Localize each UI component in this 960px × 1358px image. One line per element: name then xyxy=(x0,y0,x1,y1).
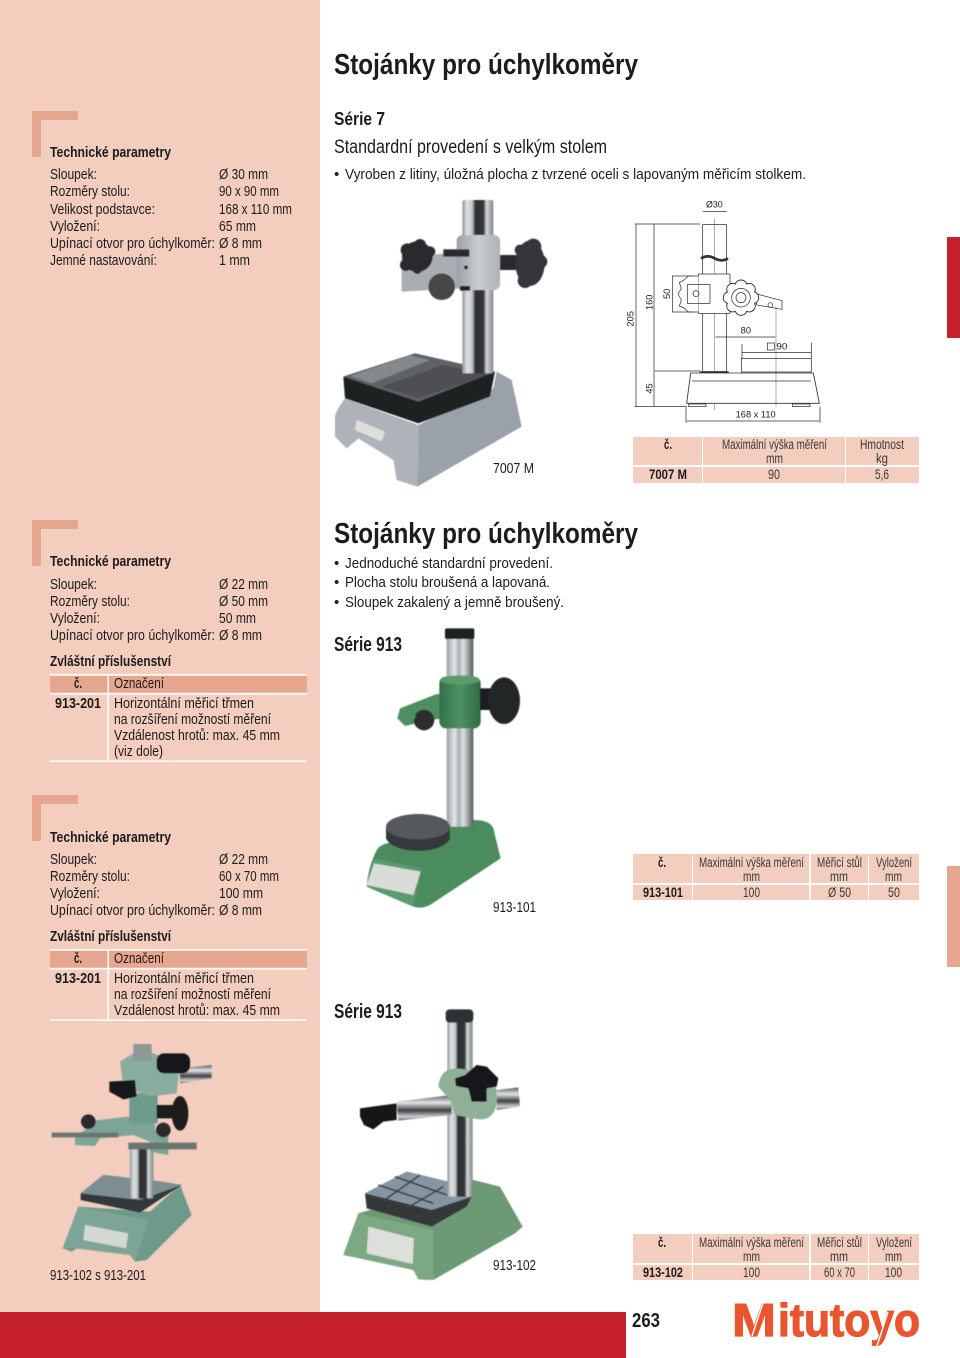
table: 913-101 xyxy=(633,854,919,900)
parameter list: 1 mm xyxy=(219,253,250,269)
left panel background xyxy=(0,0,320,1312)
accessories table: Horizontální měřicí třmen xyxy=(114,971,254,987)
parameter list: Rozměry stolu: xyxy=(50,184,130,200)
technical drawing: 50 xyxy=(662,289,672,299)
table: 7007 M: kg xyxy=(876,451,888,466)
parameter list: Jemné nastavování: xyxy=(50,253,157,269)
feature bullets: Sloupek zakalený a jemně broušený. xyxy=(345,594,564,611)
table: 913-101: 913-101 xyxy=(643,885,683,900)
corner bracket xyxy=(32,520,78,566)
series 913 label: Série 913 xyxy=(334,1001,402,1023)
model label 7007 M: 7007 M xyxy=(493,461,534,477)
feature bullets: • xyxy=(334,594,339,611)
technical drawing xyxy=(625,200,820,423)
logo: Mitutoyo xyxy=(732,1294,920,1352)
accessories table: (viz dole) xyxy=(114,744,163,760)
parameter list: Vyložení: xyxy=(50,219,100,235)
heading: technical parameters: Technické parametry xyxy=(50,145,171,161)
subtitle: Standardní provedení s velkým stolem xyxy=(334,137,607,158)
technical drawing: Ø30 xyxy=(706,200,723,210)
technical drawing: 160 xyxy=(644,295,654,310)
photo: stand 7007 M xyxy=(335,200,547,487)
table: 913-101: mm xyxy=(830,869,848,884)
technical drawing: 168 x 110 xyxy=(736,409,776,419)
parameter list: 65 mm xyxy=(219,219,256,235)
accessories table xyxy=(50,949,307,1021)
corner bracket xyxy=(32,795,78,841)
parameter list xyxy=(50,167,292,269)
table: 913-102: 913-102 xyxy=(643,1265,683,1280)
description bullet: • xyxy=(334,166,339,183)
heading: special accessories: Zvláštní příslušenství xyxy=(50,929,172,945)
table: 7007 M xyxy=(633,437,919,483)
parameter list: Ø 8 mm xyxy=(219,628,262,644)
parameter list: Sloupek: xyxy=(50,577,97,593)
feature bullets: • xyxy=(334,574,339,591)
parameter list: Vyložení: xyxy=(50,611,100,627)
table: 913-102: mm xyxy=(743,1249,760,1264)
accessories table: 913-201 xyxy=(55,696,101,712)
parameter list: Upínací otvor pro úchylkoměr: xyxy=(50,628,215,644)
model label 913-102 s 913-201: 913-102 s 913-201 xyxy=(50,1268,146,1284)
accessories table: č. xyxy=(74,676,82,692)
table: 913-101: 100 xyxy=(743,885,760,900)
parameter list: Vyložení: xyxy=(50,886,100,902)
table: 913-102: mm xyxy=(830,1249,848,1264)
model label 913-102: 913-102 xyxy=(493,1258,536,1274)
main title: Stojánky pro úchylkoměry xyxy=(334,49,638,81)
corner bracket xyxy=(32,111,78,157)
table: 913-102: č. xyxy=(658,1235,666,1250)
feature bullets: Plocha stolu broušená a lapovaná. xyxy=(345,574,550,591)
table: 7007 M: 5,6 xyxy=(875,467,889,482)
parameter list xyxy=(50,577,268,644)
parameter list: Ø 8 mm xyxy=(219,236,262,252)
parameter list: 60 x 70 mm xyxy=(219,869,279,885)
parameter list: Upínací otvor pro úchylkoměr: xyxy=(50,903,215,919)
description bullet: Vyroben z litiny, úložná plocha z tvrzené oceli s lapovaným měřicím stolkem. xyxy=(345,166,806,183)
accessories table: Vzdálenost hrotů: max. 45 mm xyxy=(114,1003,280,1019)
logo: Mitutoyo: itutoyo xyxy=(778,1294,920,1346)
model label 913-101: 913-101 xyxy=(493,900,536,916)
photo: stand 913-102 with 913-201 xyxy=(52,1044,212,1262)
feature bullets xyxy=(334,555,564,611)
heading: technical parameters: Technické parametry xyxy=(50,554,171,570)
parameter list: Rozměry stolu: xyxy=(50,869,130,885)
second title: Stojánky pro úchylkoměry xyxy=(334,518,638,550)
feature bullets: • xyxy=(334,555,339,572)
red side tab xyxy=(947,237,960,338)
accessories table: Označení xyxy=(114,951,164,967)
accessories table: č. xyxy=(74,951,82,967)
series 913 label: Série 913 xyxy=(334,634,402,656)
parameter list: Sloupek: xyxy=(50,167,97,183)
table: 913-102: 100 xyxy=(885,1265,902,1280)
table: 913-102 xyxy=(633,1234,919,1280)
parameter list: Ø 22 mm xyxy=(219,852,268,868)
accessories table: Horizontální měřicí třmen xyxy=(114,696,254,712)
parameter list: Rozměry stolu: xyxy=(50,594,130,610)
photo: stand 913-102 xyxy=(343,1009,523,1280)
parameter list: Ø 30 mm xyxy=(219,167,268,183)
parameter list: Upínací otvor pro úchylkoměr: xyxy=(50,236,215,252)
table: 913-102: mm xyxy=(885,1249,902,1264)
accessories table: Označení xyxy=(114,676,164,692)
accessories table: 913-201 xyxy=(55,971,101,987)
table: 7007 M: 90 xyxy=(768,467,780,482)
table: 7007 M: mm xyxy=(766,451,783,466)
panel: technical parameters 913-102 xyxy=(32,795,307,1021)
salmon side tab xyxy=(947,866,960,967)
technical drawing: 205 xyxy=(625,311,635,327)
parameter list: 168 x 110 mm xyxy=(219,202,292,218)
technical drawing: 45 xyxy=(644,383,654,394)
table: 7007 M: č. xyxy=(664,437,672,452)
technical drawing: 80 xyxy=(741,326,751,336)
table: 7007 M: Hmotnost xyxy=(860,437,904,452)
table: 913-101: č. xyxy=(658,855,666,870)
parameter list: Ø 22 mm xyxy=(219,577,268,593)
parameter list: 50 mm xyxy=(219,611,256,627)
photo: stand 913-101 xyxy=(367,628,520,908)
accessories table: na rozšíření možností měření xyxy=(114,987,271,1003)
parameter list: Ø 8 mm xyxy=(219,903,262,919)
table: 913-102: Vyložení xyxy=(876,1235,912,1250)
feature bullets: Jednoduché standardní provedení. xyxy=(345,555,553,572)
parameter list xyxy=(50,852,279,919)
heading: technical parameters: Technické parametry xyxy=(50,830,171,846)
table: 913-102: 100 xyxy=(743,1265,760,1280)
table: 913-101: 50 xyxy=(888,885,900,900)
table: 913-101: Vyložení xyxy=(876,855,912,870)
parameter list: 100 mm xyxy=(219,886,263,902)
technical drawing: 90 xyxy=(776,342,787,352)
parameter list: Velikost podstavce: xyxy=(50,202,155,218)
footer red bar xyxy=(0,1312,626,1358)
logo: Mitutoyo: M xyxy=(732,1294,776,1346)
table: 913-102: Maximální výška měření xyxy=(699,1235,804,1250)
table: 913-101: mm xyxy=(885,869,902,884)
parameter list: Ø 50 mm xyxy=(219,594,268,610)
table: 913-101: Maximální výška měření xyxy=(699,855,804,870)
parameter list: 90 x 90 mm xyxy=(219,184,279,200)
panel: technical parameters 913-101 xyxy=(32,520,307,762)
table: 913-101: Měřicí stůl xyxy=(817,855,862,870)
parameter list: Sloupek: xyxy=(50,852,97,868)
table: 7007 M: 7007 M xyxy=(649,467,687,482)
series 7 label: Série 7 xyxy=(334,108,385,129)
accessories table: na rozšíření možností měření xyxy=(114,712,271,728)
accessories table: Vzdálenost hrotů: max. 45 mm xyxy=(114,728,280,744)
page number: 263 xyxy=(632,1310,660,1332)
table: 913-102: 60 x 70 xyxy=(824,1265,855,1280)
table: 913-101: mm xyxy=(743,869,760,884)
table: 913-101: Ø 50 xyxy=(828,885,851,900)
heading: special accessories: Zvláštní příslušenství xyxy=(50,654,172,670)
accessories table xyxy=(50,674,307,762)
table: 7007 M: Maximální výška měření xyxy=(722,437,827,452)
panel: technical parameters series 7 xyxy=(32,111,292,269)
table: 913-102: Měřicí stůl xyxy=(817,1235,862,1250)
